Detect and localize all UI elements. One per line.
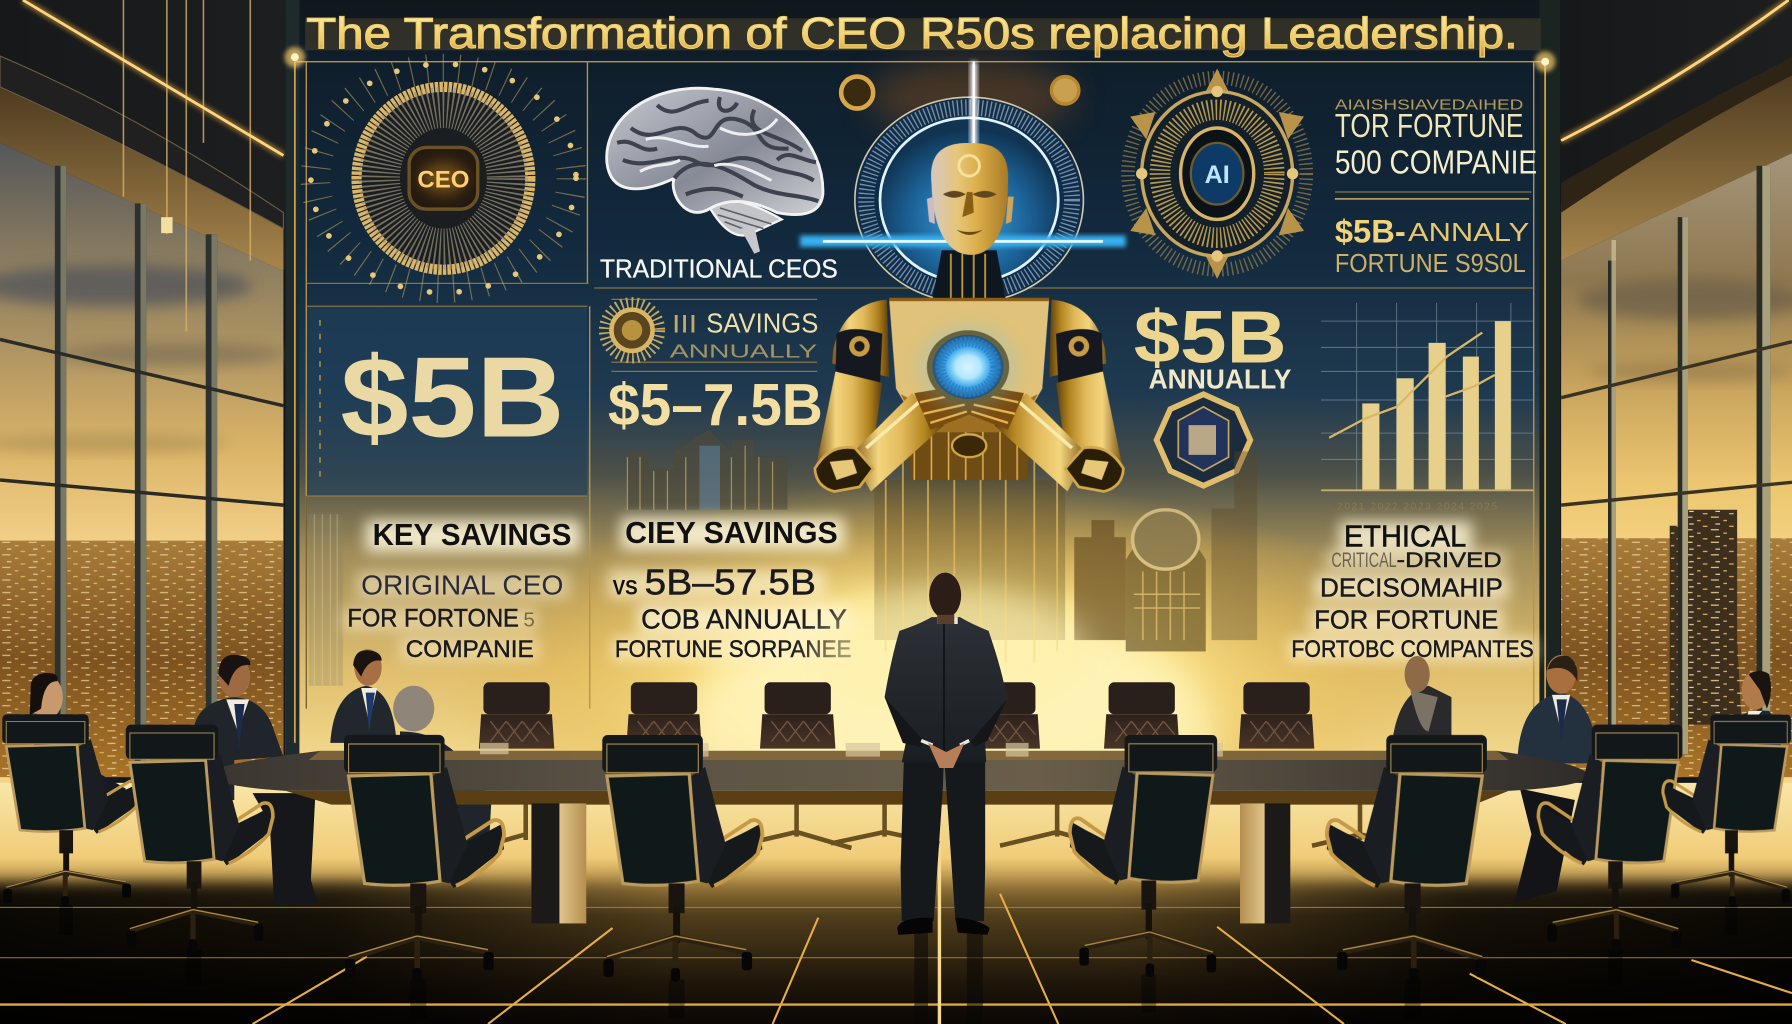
text block: key savings [347,517,571,663]
text block: ethical decision-making: FORTOBC COMPANTES [1291,636,1534,663]
text block: ethical decision-making: ETHICAL [1344,518,1466,553]
standing executive seen from behind [885,573,1007,1024]
text block: Fortune 500 companies: TOR FORTUNE [1335,108,1523,145]
text block: ethical decision-making: DECISOMAHIP [1320,573,1503,603]
floor with gold inlay lines [0,783,1792,1024]
text block: $5B annually: FORTUNE S9S0L [1335,248,1526,278]
icon: AI emblem: AI [1205,161,1230,189]
icon: CEO chip emblem: CEO [417,166,469,193]
text block: Fortune 500 companies: AIAISHSIAVEDAIHED [1335,98,1524,114]
text block: key savings: ORIGINAL CEO [361,569,563,600]
icon: human brain [607,88,823,254]
text block: key savings: KEY SAVINGS [373,517,571,552]
robot tower city beneath AI figure [814,457,1088,726]
stat: $5-7.5B: $5–7.5B [608,371,823,438]
text block: ethical decision-making [1291,518,1534,663]
text block: savings range: VS [613,574,638,599]
text block: $5B annually: ANNALY [1408,217,1529,247]
bar chart [1321,303,1534,513]
lamps at display corners [285,47,1555,72]
text block: key savings: FOR FORTONE [347,604,519,632]
seated executives right side [1392,655,1783,903]
stat: $5B annually: ANNUALLY [1149,364,1291,395]
text block: ethical decision-making: CRITICAL [1331,547,1397,572]
text block: savings range: CIEY SAVINGS [625,515,838,550]
text block: key savings: 5 [523,608,535,631]
icon: savings coin and heading: III [672,311,697,339]
text block: savings range: COB ANNUALLY [641,604,847,635]
boardroom table [209,743,1589,923]
right window wall [1557,0,1792,789]
text block: Fortune 500 companies [1335,98,1537,199]
text block: ethical decision-making: -DRIVED [1397,547,1502,572]
main display wall background [286,0,1560,891]
stat: $5B large: $5B [341,335,565,462]
icon: savings coin and heading: SAVINGS [706,308,818,339]
title: The Transformation of CEO R50s replacing Leadership. [306,10,1518,58]
icon: hexagon badge [1157,394,1250,486]
icon: AI emblem [1128,69,1306,279]
text glow patches [343,518,1536,661]
AI humanoid robot [800,62,1126,491]
text block: savings range [613,515,851,663]
far-side brown chairs [479,682,1314,749]
bar chart: 2021 2022 2023 2024 2025 [1337,502,1497,513]
text block: ethical decision-making: FOR FORTUNE [1314,605,1498,635]
near executive chairs [2,714,1791,1018]
icon: CEO chip emblem [311,64,576,293]
seated executives left side [30,649,491,905]
text block: savings range: FORTUNE SORPANEE [615,636,851,663]
text block: Fortune 500 companies: 500 COMPANIE [1335,145,1537,182]
left window wall [0,0,286,789]
text block: $5B annually: $5B- [1335,213,1406,249]
text block: key savings: COMPANIE [406,636,534,663]
icon: savings coin and heading [605,303,818,362]
stat: $5B annually: $5B [1134,295,1287,378]
small skyline graphics [309,430,1257,686]
text block: $5B annually [1335,213,1529,278]
text block: savings range: 5B–57.5B [645,561,816,602]
title band [305,18,1541,50]
icon: savings coin and heading: ANNUALLY [670,341,817,362]
label: traditional CEOs: TRADITIONAL CEOS [600,254,838,284]
